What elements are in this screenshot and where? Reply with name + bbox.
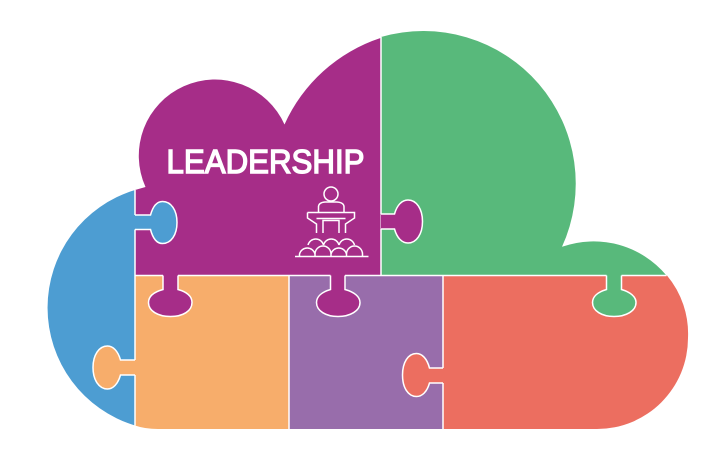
puzzle piece: blue [48,190,135,426]
icon: speaker at podium with audience [295,187,368,256]
tab: red into violet [402,354,443,396]
tab: blue into purple [135,202,177,244]
seams between pieces [135,37,666,429]
tab: green into red [592,276,636,316]
puzzle piece: purple [135,38,380,276]
puzzle piece: green [381,31,666,276]
puzzle piece: violet [289,276,443,429]
puzzle piece: orange [135,276,289,429]
tab: purple into violet [316,276,360,316]
tab: purple into green [381,200,422,243]
tab: orange into blue [93,346,135,389]
tab: purple into orange [148,276,192,316]
puzzle piece: red [443,276,688,429]
heading: LEADERSHIP: LEADERSHIP [166,144,364,181]
